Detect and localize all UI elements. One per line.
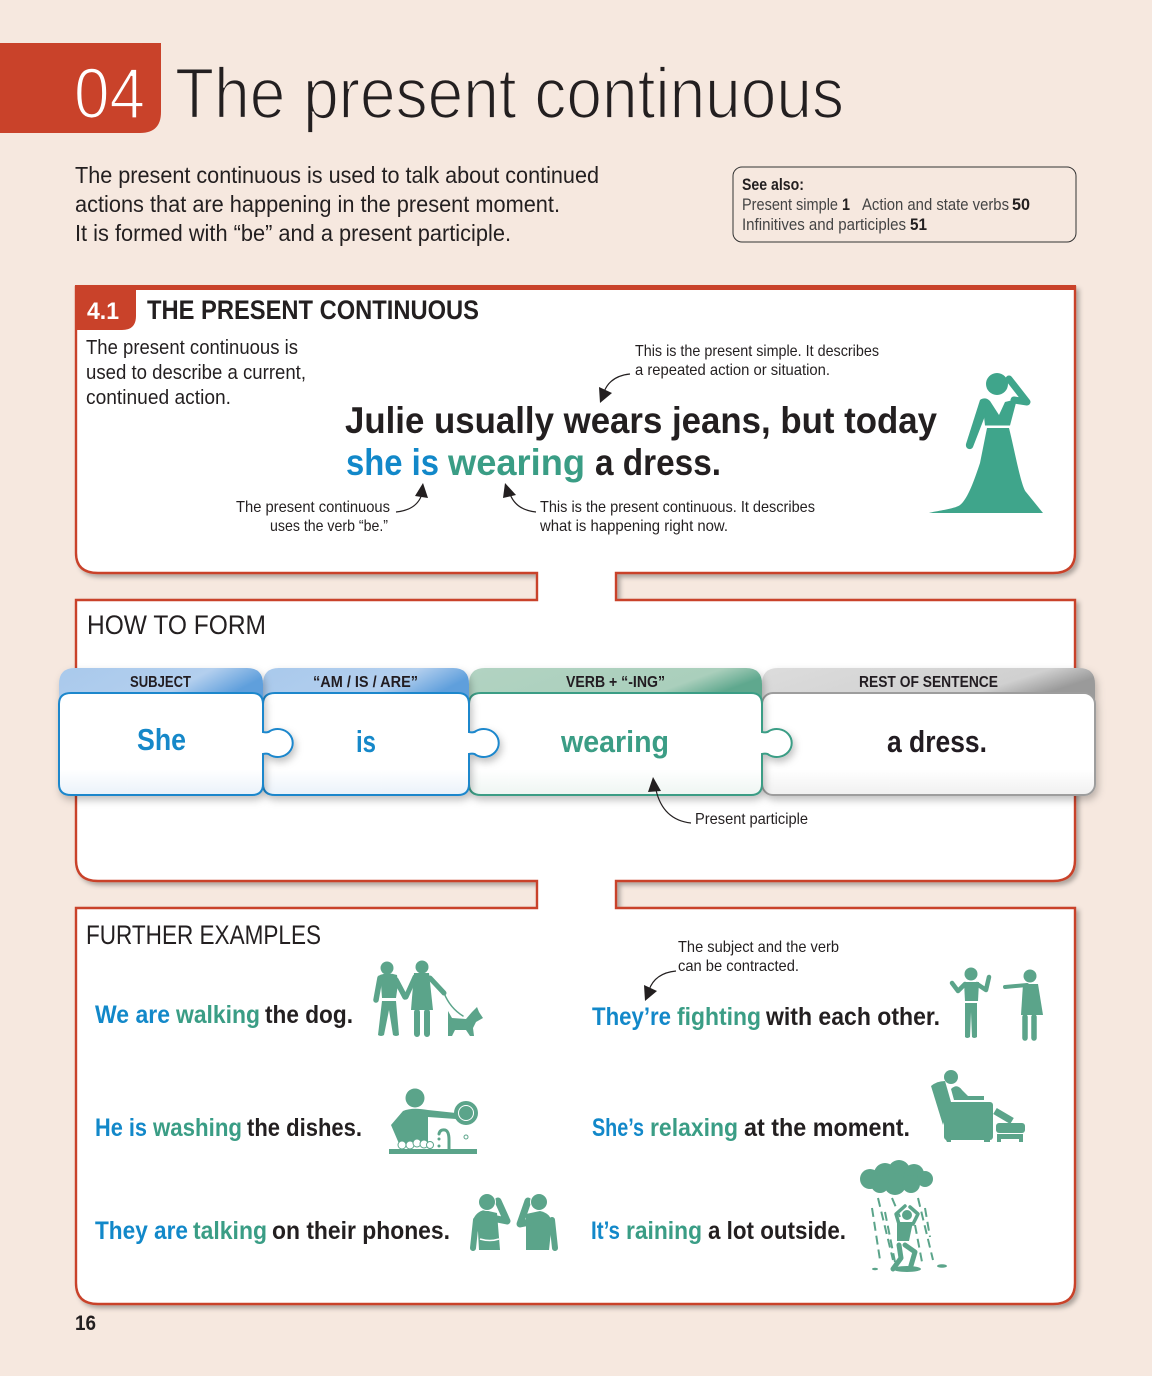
example: fighting: fighting: [677, 1003, 761, 1031]
annotation: verb be: uses the verb “be.”: [270, 518, 388, 535]
heading: further examples: FURTHER EXAMPLES: [86, 920, 321, 950]
panel 4.1 description: used to describe a current,: [86, 362, 306, 384]
example: raining: raining: [626, 1217, 702, 1245]
annotation: verb be: [236, 483, 428, 535]
see also box: Action and state verbs: [862, 196, 1009, 214]
piece: subject: [59, 668, 293, 795]
example: relaxing: [592, 1114, 910, 1142]
icon: person relaxing in armchair: [931, 1070, 1025, 1142]
example: talking: [95, 1217, 450, 1245]
icon: people arguing: [952, 968, 1043, 1038]
example: talking: They are: [95, 1217, 188, 1245]
panel 4.1 heading: [75, 285, 1076, 330]
example: fighting: [592, 1003, 940, 1031]
example: relaxing: at the moment.: [744, 1114, 910, 1142]
piece: rest of sentence: [762, 668, 1095, 795]
example: washing: [95, 1114, 362, 1142]
panel 4.1 description: The present continuous is: [86, 337, 298, 359]
piece: verb + ing: VERB + “-ING”: [566, 674, 665, 691]
icon: two people on phones: [473, 1193, 555, 1250]
chapter number tab: [0, 43, 161, 134]
note: contraction: The subject and the verb: [678, 939, 839, 956]
see also box: 51: [910, 216, 927, 234]
main example sentence: [345, 399, 937, 483]
see also box: [733, 167, 1076, 242]
annotation: present participle: [648, 777, 808, 828]
example: washing: the dishes.: [247, 1114, 362, 1142]
annotation: verb be: The present continuous: [236, 499, 390, 516]
piece: rest of sentence: REST OF SENTENCE: [859, 674, 998, 691]
panel 4.1 description: continued action.: [86, 387, 231, 409]
example: walking: walking: [175, 1001, 260, 1029]
example: washing: He is: [95, 1114, 147, 1142]
example: walking: We are: [95, 1001, 170, 1029]
panel 4.1 heading: 4.1: [87, 298, 119, 325]
main example sentence: wearing: [447, 441, 585, 483]
panel 4.1 heading: THE PRESENT CONTINUOUS: [147, 295, 479, 325]
piece: subject: She: [137, 722, 186, 757]
example: relaxing: She’s: [592, 1114, 644, 1142]
page number: 16: [75, 1312, 96, 1335]
title: The present continuous: [175, 55, 844, 134]
annotation: present continuous: what is happening right now.: [539, 518, 728, 535]
example: talking: talking: [193, 1217, 267, 1245]
intro text: [75, 162, 599, 246]
intro text: actions that are happening in the present moment.: [75, 191, 560, 217]
note: contraction: can be contracted.: [678, 958, 799, 975]
annotation: present simple: a repeated action or situation.: [635, 362, 830, 379]
panels outline: [76, 287, 1075, 1304]
example: walking: the dog.: [265, 1001, 353, 1029]
annotation: present participle: Present participle: [695, 811, 808, 828]
see also box: See also:: [742, 176, 804, 194]
example: raining: [591, 1217, 846, 1245]
puzzle diagram: [59, 668, 1095, 795]
main example sentence: Julie usually wears jeans, but today: [345, 399, 937, 441]
icon: man washing dishes: [389, 1088, 478, 1154]
intro text: It is formed with “be” and a present participle.: [75, 220, 511, 246]
annotation: present simple: This is the present simple. It describes: [635, 343, 879, 360]
example: walking: [95, 1001, 353, 1029]
main example sentence: a dress.: [595, 441, 721, 483]
annotation: present continuous: This is the present continuous. It describes: [540, 499, 815, 516]
annotation: present continuous: [503, 483, 815, 535]
see also box: 1: [842, 196, 850, 214]
icon: woman in dress: [929, 373, 1043, 513]
piece: verb + ing: [469, 668, 792, 795]
see also box: Present simple: [742, 196, 838, 214]
icon: couple walking dog: [376, 960, 483, 1036]
note: contraction: [644, 939, 839, 1001]
heading: how to form: HOW TO FORM: [87, 610, 266, 640]
intro text: The present continuous is used to talk about continued: [75, 162, 599, 188]
example: raining: It’s: [591, 1217, 620, 1245]
see also box: 50: [1012, 196, 1030, 214]
example: raining: a lot outside.: [708, 1217, 846, 1245]
main example sentence: she is: [346, 441, 439, 483]
icon: person in the rain: [860, 1160, 947, 1272]
example: washing: washing: [152, 1114, 242, 1142]
piece: verb + ing: wearing: [560, 724, 669, 759]
example: relaxing: relaxing: [650, 1114, 738, 1142]
panel 4.1 description: [86, 337, 306, 409]
piece: am is are: “AM / IS / ARE”: [313, 674, 418, 691]
piece: am is are: [263, 668, 499, 795]
example: fighting: with each other.: [765, 1003, 940, 1031]
chapter number tab: 04: [74, 55, 145, 134]
example: fighting: They’re: [592, 1003, 671, 1031]
annotation: present simple: [599, 343, 879, 403]
see also box: Infinitives and participles: [742, 216, 906, 234]
piece: am is are: is: [356, 724, 376, 759]
piece: subject: SUBJECT: [130, 674, 191, 691]
piece: rest of sentence: a dress.: [887, 724, 987, 759]
example: talking: on their phones.: [272, 1217, 450, 1245]
